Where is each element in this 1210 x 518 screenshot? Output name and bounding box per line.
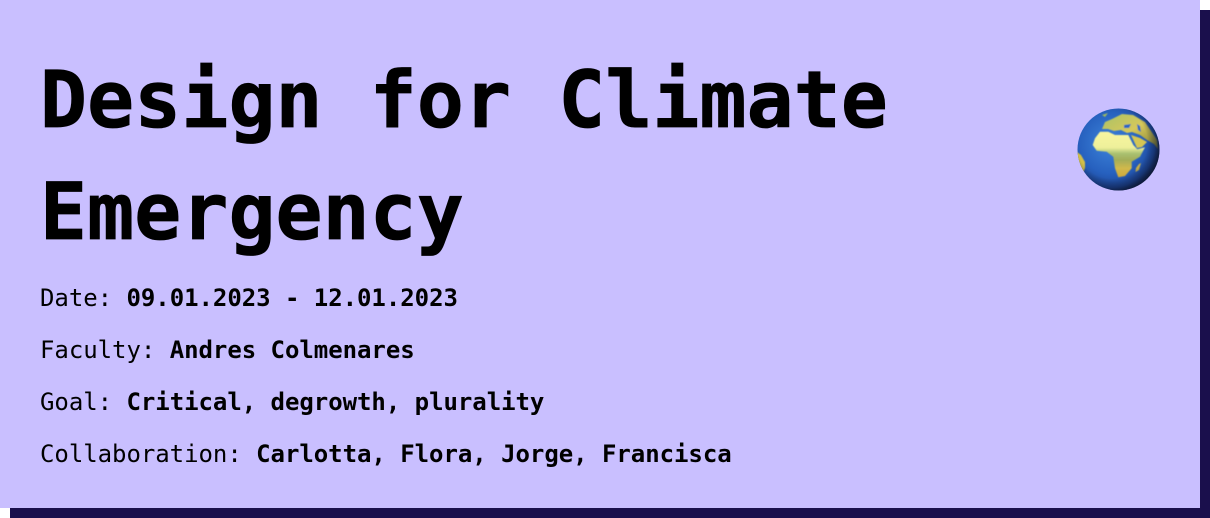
Arabia [1131, 135, 1147, 148]
title: Design for Climate [40, 56, 888, 146]
South America [1077, 152, 1085, 173]
Africa [1093, 132, 1145, 177]
edge shading [1078, 108, 1160, 190]
Madagascar [1136, 163, 1141, 172]
title [40, 56, 888, 258]
text: goal: Goal: Critical, degrowth, plurality [40, 388, 544, 416]
Greenland hint [1102, 113, 1108, 117]
Europe and Asia [1102, 114, 1158, 149]
text: faculty: Faculty: Andres Colmenares [40, 336, 415, 364]
Black Sea [1124, 124, 1131, 128]
text: date: Date: 09.01.2023 - 12.01.2023 [40, 284, 458, 312]
Caspian Sea [1137, 124, 1141, 132]
icon: earth globe [1078, 108, 1160, 190]
text: collaboration: Collaboration: Carlotta, Flora, Jorge, Francisca [40, 440, 732, 468]
title: Emergency [40, 168, 464, 258]
